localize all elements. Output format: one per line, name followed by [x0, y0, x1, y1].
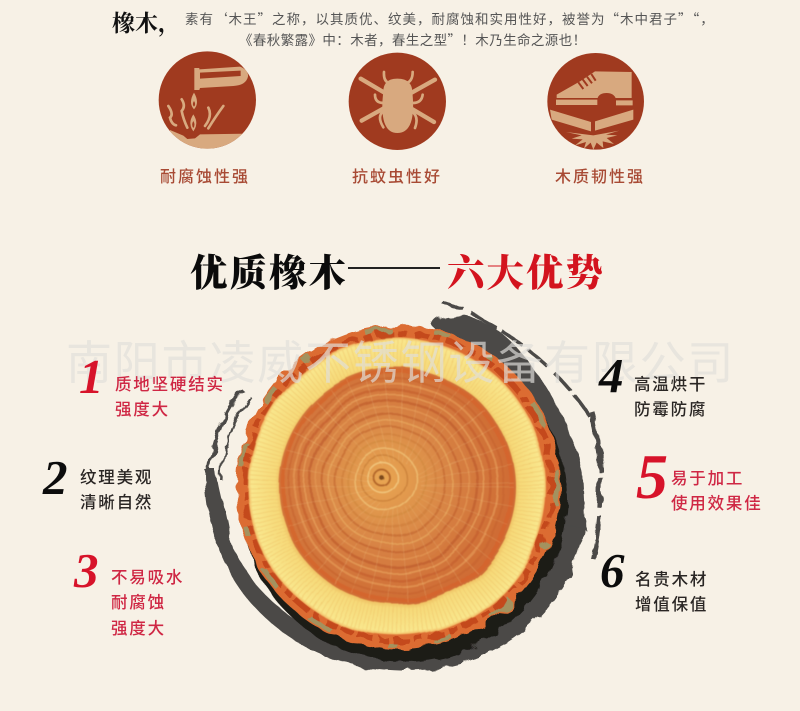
advantage 3: [74, 543, 184, 638]
text 2: [80, 468, 153, 512]
text 5: 使用效果佳: [671, 495, 762, 513]
text 4: 高温烘干: [634, 376, 707, 394]
number 3: 3: [74, 543, 98, 598]
ink brush strokes: [205, 302, 600, 670]
advantage 6: [600, 543, 708, 614]
number 5: 5: [636, 441, 668, 512]
text 2: 清晰自然: [80, 494, 153, 512]
icon: insect resistance: [349, 53, 446, 150]
text 3: 耐腐蚀: [111, 594, 166, 612]
title red part: 六大优势: [447, 254, 605, 295]
icon label: 抗蚊虫性好: 抗蚊虫性好: [352, 169, 442, 186]
text 1: [115, 376, 225, 419]
title: [190, 253, 605, 295]
icon label: 木质韧性强: 木质韧性强: [555, 169, 645, 186]
text 4: 防霉防腐: [634, 401, 707, 419]
number 6: 6: [600, 543, 624, 598]
advantage 4: [598, 348, 707, 419]
text 3: 强度大: [111, 620, 166, 638]
text 1: 强度大: [115, 401, 170, 419]
icon label: 耐腐蚀性强: 耐腐蚀性强: [160, 169, 250, 186]
sapwood: [248, 338, 546, 636]
text 6: [635, 570, 708, 614]
advantage 2: [42, 450, 153, 512]
intro line 1: 素有‘木王”之称，以其质优、纹美，耐腐蚀和实用性好，被誉为“木中君子”“，: [185, 8, 715, 28]
number 1: 1: [79, 349, 104, 404]
text 6: 增值保值: [635, 596, 708, 614]
icon: corrosion resistance: [159, 51, 256, 152]
text 1: 质地坚硬结实: [115, 376, 225, 394]
advantage 5: [636, 441, 762, 513]
number 4: 4: [599, 348, 624, 403]
title: 优质橡木: [190, 254, 348, 295]
intro line 2: 《春秋繁露》中：木者，春生之型”！木乃生命之源也！: [239, 29, 586, 49]
text 5: [671, 470, 762, 513]
number 2: 2: [43, 450, 68, 505]
heartwood with growth rings: [279, 368, 515, 604]
bark: [237, 325, 561, 649]
text 6: 名贵木材: [635, 571, 708, 589]
icons row: [158, 51, 644, 150]
text 2: 纹理美观: [80, 469, 153, 487]
text 3: 不易吸水: [111, 569, 184, 587]
wood shadow: [241, 336, 567, 662]
text 3: [111, 568, 184, 638]
title dash: [348, 267, 440, 269]
intro text: [112, 5, 715, 49]
text 5: 易于加工: [671, 470, 744, 488]
watermark: 南阳市凌威不锈钢设备有限公司: [66, 337, 735, 389]
text 4: [634, 376, 707, 419]
intro heading: 橡木: 橡木，: [112, 5, 181, 38]
icon: wood toughness: [547, 53, 644, 150]
advantage 1: [79, 349, 225, 419]
